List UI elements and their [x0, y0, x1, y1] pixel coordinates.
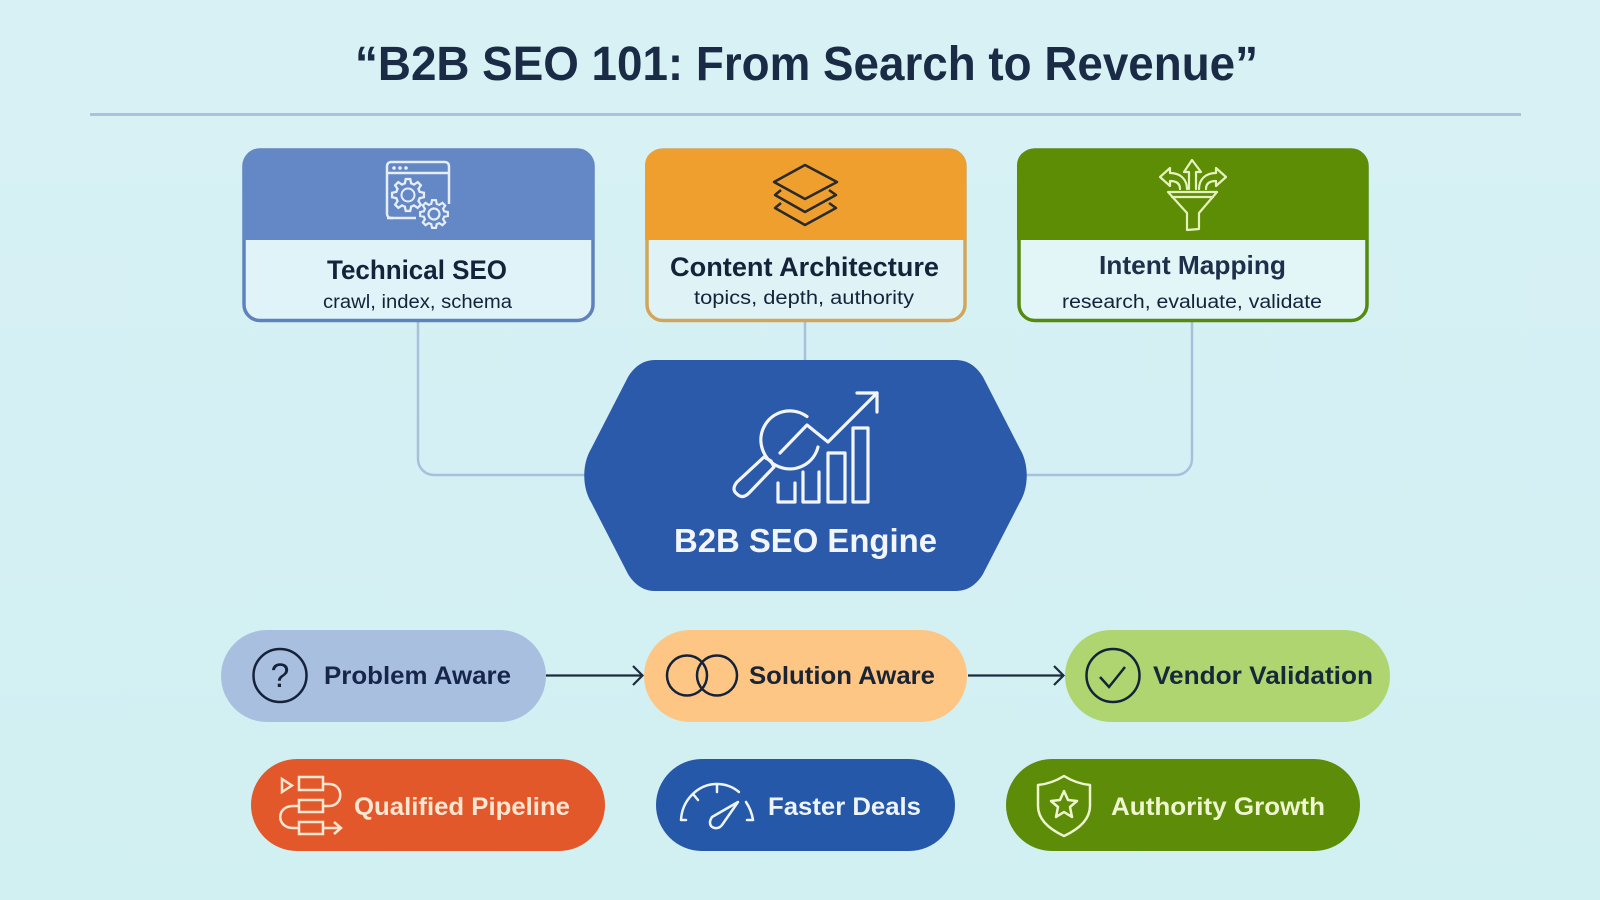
icon: funnel with arrows [1160, 160, 1226, 230]
panel: Intent Mapping [1017, 149, 1368, 320]
pill: Qualified Pipeline [251, 759, 605, 851]
label: Vendor Validation: Vendor Validation [1153, 662, 1373, 690]
connectors: cards to engine [418, 322, 1192, 475]
pill: Faster Deals [656, 759, 955, 851]
icon: browser window with gears [387, 162, 449, 228]
label: Solution Aware: Solution Aware [749, 662, 935, 690]
arrow: solution to vendor [968, 666, 1064, 685]
panel: B2B SEO Engine hexagon [584, 360, 1027, 591]
icon: stacked layers [774, 165, 837, 225]
label: Qualified Pipeline: Qualified Pipeline [354, 793, 570, 821]
icon: overlapping circles [667, 656, 737, 696]
icon: shield with star [1038, 776, 1090, 836]
icon: magnifier, growth arrow and bars [734, 393, 877, 502]
text: research, evaluate, validate: research, evaluate, validate [1062, 292, 1322, 313]
icon: pipeline flow [280, 777, 341, 834]
icon: check circle [1086, 649, 1140, 702]
text: crawl, index, schema: crawl, index, schema [323, 292, 512, 313]
label: Faster Deals: Faster Deals [768, 793, 921, 821]
icon: question mark [254, 649, 306, 702]
heading: Technical SEO: Technical SEO [327, 255, 507, 285]
panel: Content Architecture [645, 149, 966, 320]
pill: Vendor Validation [1065, 630, 1390, 722]
pill: Problem Aware [221, 630, 546, 722]
heading: Intent Mapping: Intent Mapping [1099, 250, 1286, 280]
pill: Solution Aware [644, 630, 967, 722]
pill: Authority Growth [1006, 759, 1360, 851]
panel: Technical SEO [243, 149, 594, 320]
text: topics, depth, authority: topics, depth, authority [694, 288, 915, 309]
label: Problem Aware: Problem Aware [324, 662, 511, 690]
title: “B2B SEO 101: From Search to Revenue” [355, 38, 1258, 91]
label: B2B SEO Engine: B2B SEO Engine [674, 522, 937, 559]
icon: question mark: ? [271, 657, 289, 695]
heading: Content Architecture: Content Architecture [670, 252, 939, 282]
arrow: problem to solution [546, 666, 642, 685]
label: Authority Growth: Authority Growth [1111, 793, 1325, 821]
icon: speedometer [681, 784, 753, 828]
